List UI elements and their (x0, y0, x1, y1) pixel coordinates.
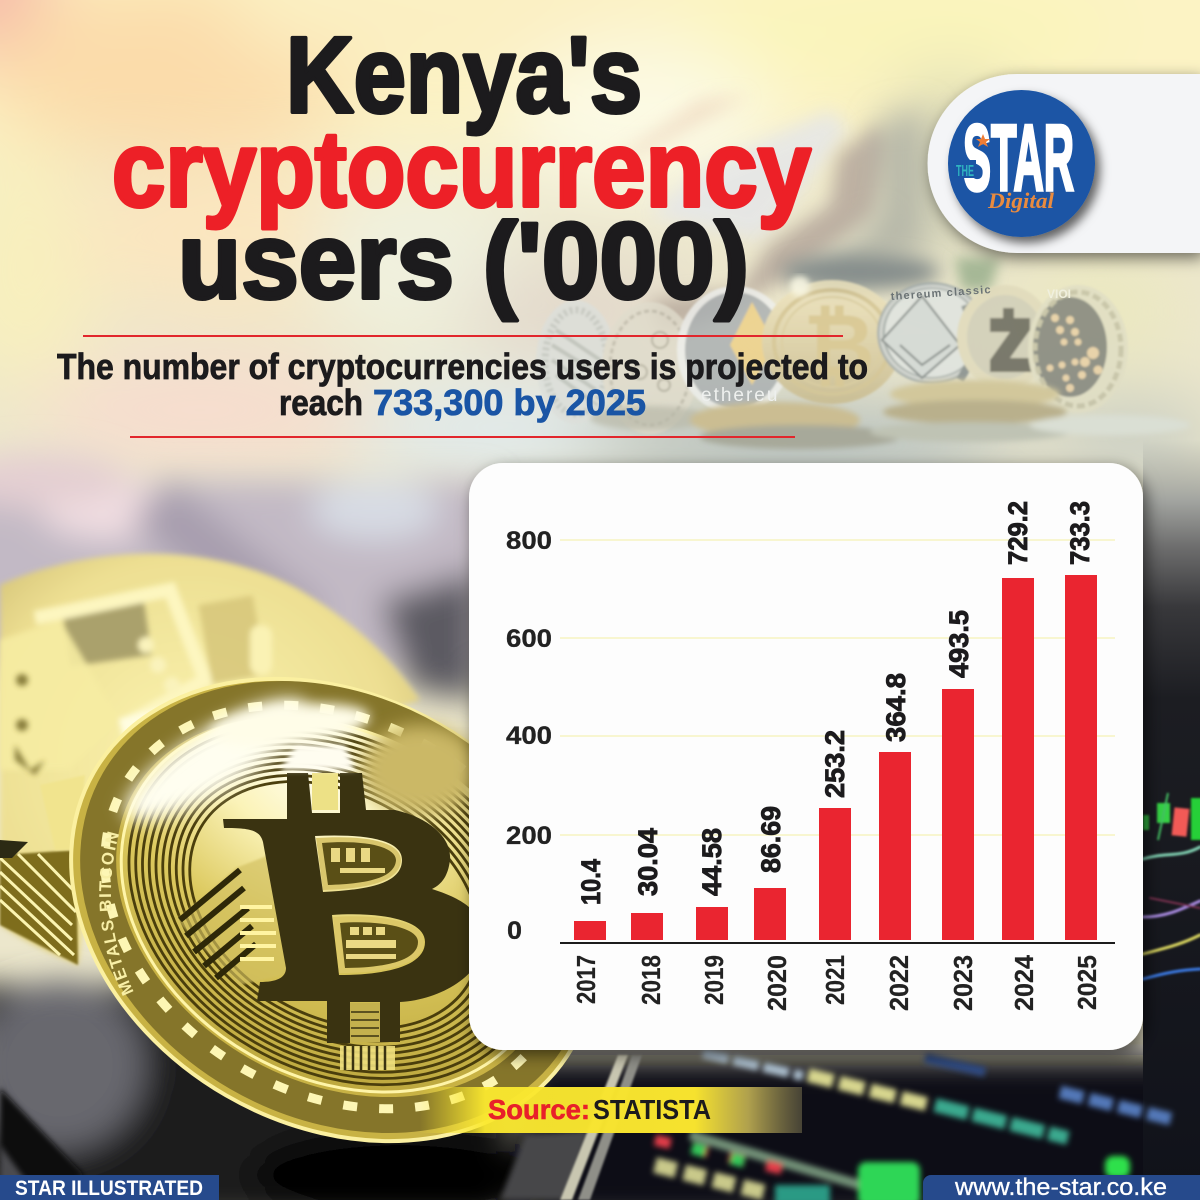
title: cryptocurrency (112, 108, 811, 229)
top crypto coins row: ₿ (803, 296, 875, 395)
icon: front bitcoin (69, 677, 573, 1144)
subtitle: reach (279, 382, 363, 423)
coin rim text: METALS BITCOIN (99, 832, 134, 996)
subtitle: The number of cryptocurrencies users is projected to (57, 346, 868, 387)
year labels: 2024 (1009, 954, 1039, 1011)
logo the: THE (956, 163, 974, 180)
value labels: 86.69 (756, 806, 786, 873)
icon: back bitcoin (0, 554, 420, 965)
value labels: 729.2 (1003, 501, 1033, 565)
title: Kenya's (286, 14, 642, 135)
y axis labels: 800 (506, 527, 552, 555)
value labels: 733.3 (1065, 501, 1095, 565)
subtitle: 733,300 by 2025 (373, 382, 646, 423)
year labels: 2019 (699, 955, 729, 1005)
title (112, 14, 811, 321)
year labels: 2018 (636, 955, 666, 1005)
year labels (571, 954, 1102, 1011)
logo star (976, 134, 990, 147)
top crypto coins row: VIOI (1047, 287, 1071, 301)
hand and phone (630, 95, 1004, 322)
top crypto coins row: ethereu (701, 385, 779, 406)
subtitle (57, 346, 868, 423)
icon: bitcoin symbol (223, 745, 484, 1070)
value labels (576, 501, 1095, 905)
year labels: 2021 (820, 955, 850, 1005)
top crypto coins row (536, 276, 1190, 449)
gridlines (560, 540, 1115, 835)
value labels: 30.04 (633, 828, 663, 896)
value labels: 364.8 (881, 673, 911, 742)
logo the (954, 160, 976, 180)
top divider (83, 335, 843, 337)
y axis labels: 200 (506, 822, 552, 850)
footer label: star illustrated: STAR ILLUSTRATED (15, 1177, 203, 1200)
logo digital: Digital (987, 188, 1055, 213)
y axis labels: 0 (507, 917, 522, 945)
y axis labels: 600 (506, 625, 552, 653)
source strip: STATISTA (593, 1094, 711, 1125)
logo badge (927, 74, 1200, 253)
value labels: 253.2 (820, 730, 850, 798)
source strip (420, 1087, 802, 1133)
source strip: Source: (488, 1094, 590, 1125)
year labels: 2023 (948, 955, 978, 1011)
y axis labels: 400 (506, 722, 552, 750)
value labels: 44.58 (697, 828, 727, 896)
value labels: 10.4 (576, 859, 606, 905)
bottom divider (130, 436, 795, 438)
title: users ('000) (178, 200, 749, 321)
keyboard and dark lower background (0, 440, 1200, 1200)
bars (574, 575, 1097, 940)
year labels: 2025 (1072, 955, 1102, 1010)
year labels: 2017 (571, 955, 601, 1004)
icon: trading chart glow (655, 793, 1200, 1200)
panel: bar chart (469, 463, 1143, 1050)
year labels: 2020 (762, 955, 792, 1011)
top crypto coins row: thereum classic (890, 284, 992, 303)
y axis labels (506, 527, 552, 945)
x axis line (560, 942, 1115, 944)
value labels: 493.5 (944, 610, 974, 678)
year labels: 2022 (884, 955, 914, 1011)
